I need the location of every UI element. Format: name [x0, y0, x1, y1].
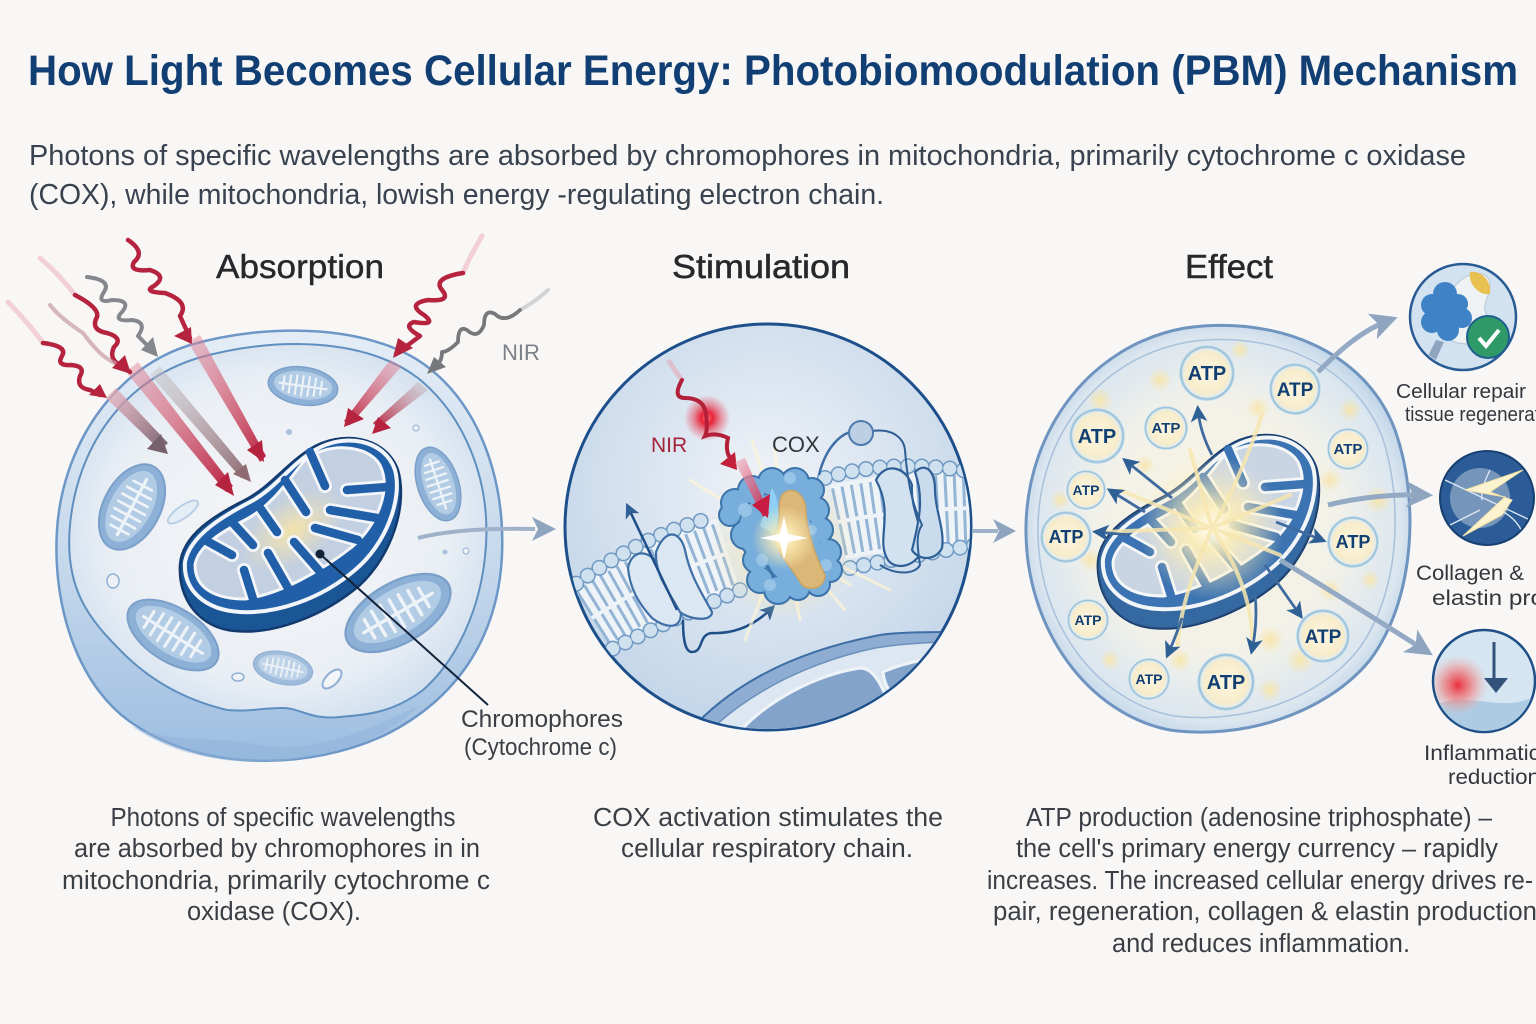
label: inflammation reduction: Inflammatic	[1424, 742, 1536, 765]
stimulation caption: cellular respiratory chain.	[621, 835, 913, 863]
starburst	[690, 440, 890, 640]
ATP bubbles: ATP	[1207, 672, 1245, 694]
shuttle sphere	[849, 421, 873, 445]
cell illustration	[56, 331, 502, 762]
arrow: absorption to stimulation	[418, 517, 556, 541]
label: collagen and elastin: Collagen &	[1416, 562, 1524, 585]
ATP bubbles: ATP	[1336, 532, 1370, 552]
absorption caption: oxidase (COX).	[187, 898, 361, 926]
arrowheads	[89, 327, 446, 496]
ATP bubbles	[1040, 345, 1379, 711]
absorption caption	[62, 804, 490, 926]
stimulation caption: COX activation stimulates the	[593, 804, 943, 832]
label: chromophores: Chromophores	[461, 706, 623, 733]
effect caption: and reduces inflammation.	[1112, 930, 1410, 958]
label: collagen and elastin: elastin pro	[1432, 587, 1536, 610]
NIR photon	[668, 360, 770, 518]
effect caption: the cell's primary energy currency – rapidly	[1016, 835, 1498, 863]
ATP bubbles: ATP	[1049, 527, 1083, 547]
heading: absorption: Absorption	[216, 248, 384, 285]
label: COX: COX	[772, 432, 820, 457]
COX protein	[720, 469, 841, 603]
intro text: Photons of specific wavelengths are absorbed by chromophores in mitochondria, primarily cytochrome c oxidase	[29, 140, 1466, 172]
label: inflammation reduction	[1424, 742, 1536, 789]
arrows to outcomes	[1280, 320, 1426, 651]
light rays	[8, 236, 548, 492]
ATP bubbles: ATP	[1073, 482, 1099, 498]
label: cellular repair: Cellular repair	[1396, 380, 1526, 403]
absorption caption: mitochondria, primarily cytochrome c	[62, 867, 490, 895]
heading: stimulation: Stimulation	[672, 248, 850, 285]
arrow: stimulation to effect	[972, 519, 1016, 543]
effect caption: ATP production (adenosine triphosphate) –	[1026, 804, 1493, 832]
cell	[1026, 325, 1410, 732]
ATP bubbles: ATP	[1152, 420, 1180, 437]
label: NIR: NIR	[651, 434, 687, 457]
heading: effect: Effect	[1185, 248, 1273, 285]
panel: stimulation	[565, 248, 985, 863]
energised mitochondrion	[1098, 435, 1319, 629]
membrane circle	[565, 324, 971, 730]
stimulation caption	[593, 804, 943, 863]
intro text	[29, 140, 1466, 211]
label: NIR: NIR	[502, 340, 540, 365]
effect caption	[987, 804, 1536, 958]
label: cellular repair	[1396, 380, 1536, 426]
absorption caption: are absorbed by chromophores in in	[74, 835, 480, 863]
ATP bubbles: ATP	[1078, 426, 1116, 448]
lipid bilayer	[565, 466, 975, 655]
intro text: (COX), while mitochondria, lowish energy -regulating electron chain.	[29, 179, 884, 211]
small mitochondria	[85, 362, 469, 692]
central mitochondrion	[180, 438, 401, 632]
panel: absorption	[8, 236, 623, 926]
lower mitochondrion	[702, 631, 941, 729]
icon: inflammation reduction	[1428, 630, 1536, 740]
wavy photons	[8, 236, 548, 395]
label: chromophores: (Cytochrome c)	[464, 734, 617, 761]
ATP bubbles: ATP	[1075, 612, 1101, 628]
membrane proteins	[628, 468, 943, 626]
ATP bubbles: ATP	[1334, 441, 1362, 458]
energy burst	[1100, 415, 1290, 650]
sparkle dots	[1050, 340, 1392, 702]
ATP bubbles: ATP	[1136, 671, 1162, 687]
transport arrows	[628, 431, 922, 652]
ATP bubbles: ATP	[1277, 380, 1314, 401]
straight beams	[188, 335, 266, 462]
absorption caption: Photons of specific wavelengths	[110, 804, 456, 832]
chromophore pointer	[316, 550, 488, 705]
ATP bubbles: ATP	[1188, 363, 1226, 385]
effect caption: pair, regeneration, collagen & elastin production	[993, 898, 1536, 926]
icon: cellular repair	[1410, 264, 1516, 370]
label: collagen and elastin	[1416, 562, 1536, 610]
panel: effect	[987, 248, 1536, 958]
label: chromophores	[461, 706, 623, 761]
icon: collagen and elastin	[1440, 451, 1534, 545]
ATP bubbles: ATP	[1305, 627, 1342, 648]
ATP arrows	[1097, 410, 1322, 654]
label: inflammation reduction: reduction	[1448, 766, 1536, 789]
